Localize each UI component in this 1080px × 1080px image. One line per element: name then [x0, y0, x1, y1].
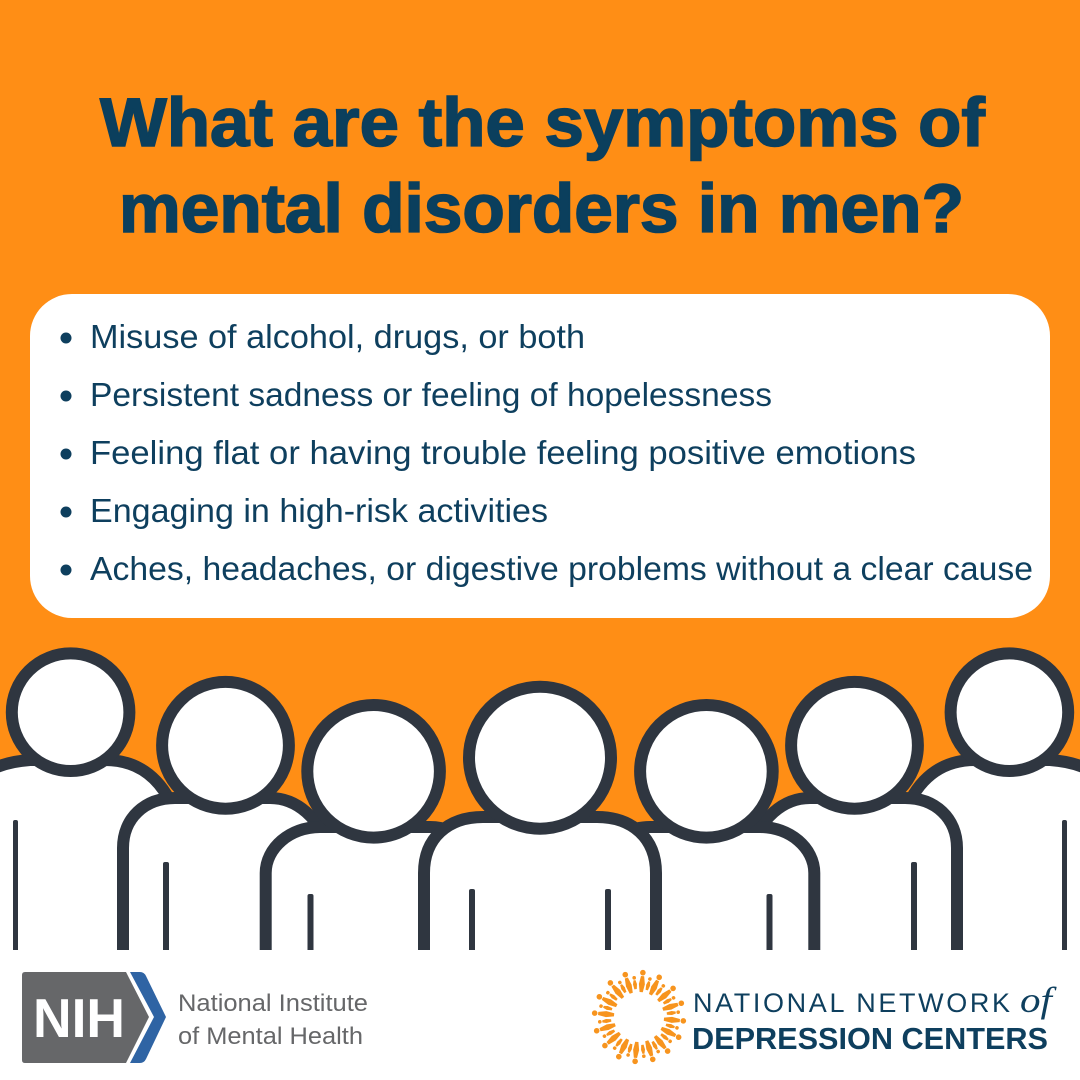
icon: sunburst of people: [592, 970, 686, 1064]
icon: NIH blue chevron: [130, 972, 166, 1063]
person 3: [266, 705, 485, 965]
title: What are the symptoms of: [100, 84, 986, 161]
panel: symptoms list: [30, 294, 1050, 618]
title: mental disorders in men?: [119, 170, 964, 247]
person 4: [424, 687, 656, 965]
footer band: [0, 950, 1080, 1080]
bullet list: Persistent sadness or feeling of hopelessness: [90, 376, 772, 413]
icon: NIH gray badge: [22, 972, 149, 1063]
title: [100, 84, 986, 247]
bullet list: Misuse of alcohol, drugs, or both: [90, 318, 585, 355]
NIMH name: of Mental Health: [178, 1023, 363, 1050]
NIH letters: NIH: [33, 987, 125, 1049]
icon: group of people: [0, 653, 1080, 965]
organisation name: [692, 980, 1058, 1056]
organisation name: DEPRESSION CENTERS: [692, 1021, 1048, 1056]
organisation name: NATIONAL NETWORK: [693, 988, 1010, 1018]
person 2: [123, 682, 335, 965]
logo: National Network of Depression Centers: [592, 970, 1058, 1064]
person 6: [745, 682, 957, 965]
bullet list: [60, 318, 1033, 587]
organisation name: of: [1020, 980, 1058, 1020]
bullet list: Engaging in high-risk activities: [90, 492, 548, 529]
person 7: [908, 653, 1080, 965]
logo: NIH National Institute of Mental Health: [22, 972, 368, 1063]
NIMH name: National Institute: [178, 990, 368, 1017]
bullet list: Feeling flat or having trouble feeling positive emotions: [90, 434, 916, 471]
bullet list: Aches, headaches, or digestive problems without a clear cause: [90, 550, 1033, 587]
person 1: [0, 653, 172, 965]
person 5: [595, 705, 814, 965]
NIMH name: [178, 990, 368, 1050]
